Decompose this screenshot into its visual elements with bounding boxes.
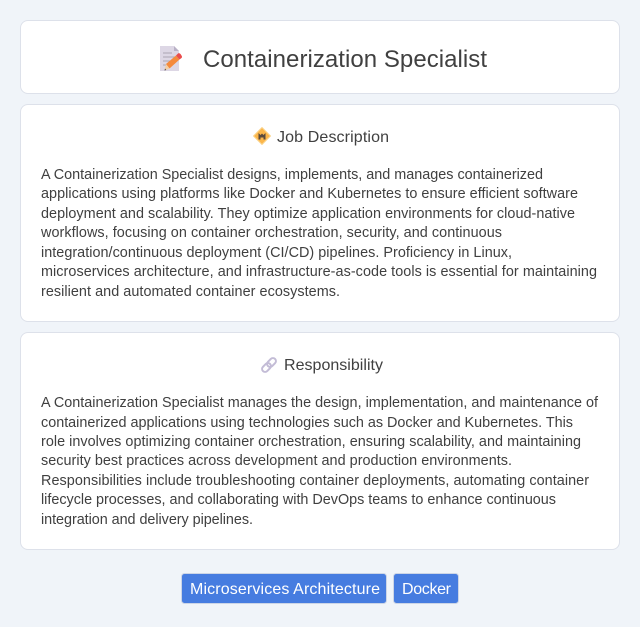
text block: responsibility: role involves optimizing container orchestration, ensuring scalability, and maintaining (41, 434, 581, 450)
tag: Docker (394, 574, 458, 604)
panel: job description (20, 104, 620, 322)
text block: responsibility: integration and delivery pipelines. (41, 512, 253, 528)
panel: title card (20, 20, 620, 94)
text block: responsibility: containerized applications using technologies such as Docker and Kubernetes. This (41, 415, 573, 431)
icon: memo and pencil (160, 46, 182, 71)
text block: job description: A Containerization Specialist designs, implements, and manages containerized (41, 167, 543, 183)
text block: job description (40, 167, 597, 300)
tag: Microservices Architecture (182, 574, 386, 604)
text block: responsibility: lifecycle processes, and collaborating with DevOps teams to enhance continuous (41, 492, 556, 508)
text block: responsibility: Responsibilities include troubleshooting container deployments, automating container (41, 473, 589, 489)
heading: responsibility: Responsibility (284, 357, 383, 374)
text block: job description: applications using platforms like Docker and Kubernetes to ensure efficient software (41, 186, 578, 202)
panel: responsibility (20, 332, 620, 550)
heading: job description: Job Description (277, 129, 389, 146)
title: Containerization Specialist (203, 46, 487, 73)
icon: link (261, 357, 277, 373)
text block: responsibility: A Containerization Specialist manages the design, implementation, and maintenance of (41, 395, 599, 411)
text block: job description: microservices architecture, and infrastructure-as-code tools is essential for maintaining (41, 264, 597, 280)
text block: job description: integration/continuous deployment (CI/CD) pipelines. Proficiency in Linux, (41, 245, 512, 261)
text block: responsibility (41, 395, 599, 528)
text block: job description: deployment and scalability. They optimize application environments for cloud-native (41, 206, 575, 222)
text block: responsibility: security best practices across development and production environments. (41, 453, 512, 469)
tag: Docker: Docker (402, 581, 452, 598)
icon: orange diamond (254, 128, 270, 144)
text block: job description: workflows, focusing on container orchestration, security, and continuous (40, 225, 502, 241)
text block: job description: resilient and automated container ecosystems. (41, 284, 340, 300)
tag: Microservices Architecture: Microservices Architecture (190, 581, 380, 598)
